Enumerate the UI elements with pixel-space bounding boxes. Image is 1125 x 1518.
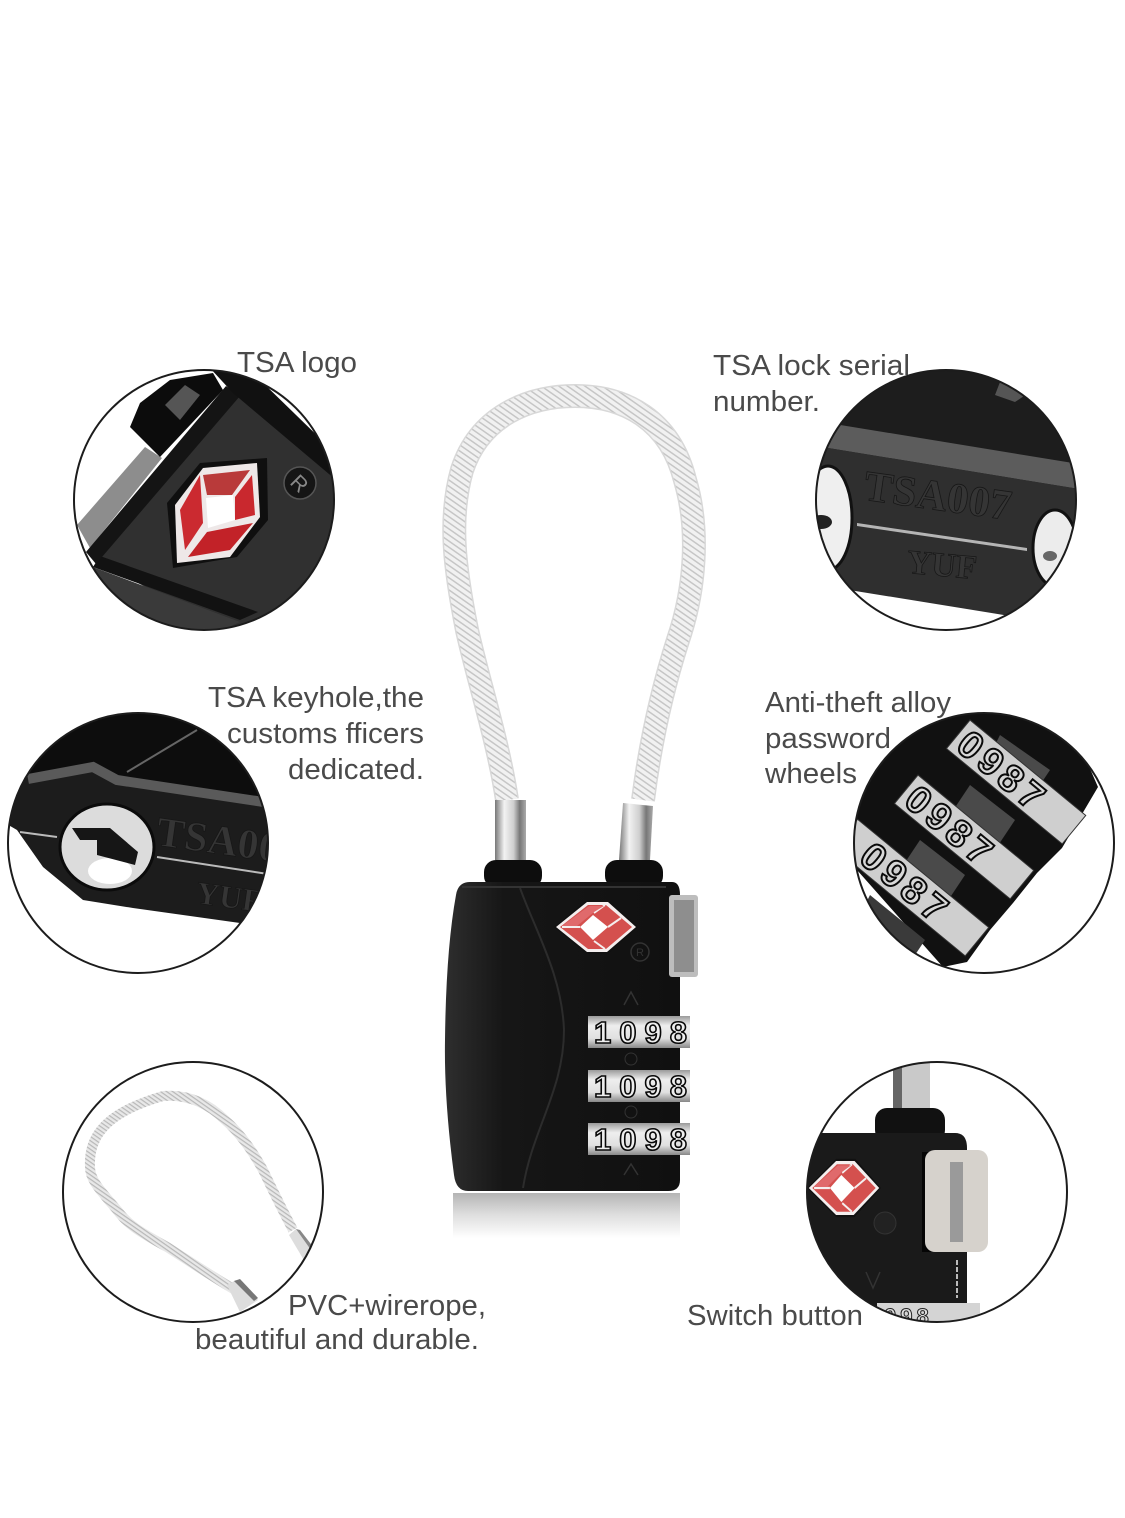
main product: TSA cable lock (445, 396, 698, 1238)
label: TSA keyhole: dedicated. (288, 754, 424, 786)
label: anti-theft alloy password wheels: wheels (764, 758, 857, 790)
registered mark: R (636, 947, 644, 959)
switch button (669, 895, 698, 977)
combination wheels: 1098 (594, 1015, 695, 1050)
combination wheels: 1098 (594, 1122, 695, 1157)
label: anti-theft alloy password wheels: Anti-theft alloy (765, 687, 951, 719)
black lock body (445, 882, 680, 1191)
body highlight curve (520, 888, 564, 1188)
callout: password wheels detail: 0987 (949, 723, 1056, 822)
label: switch button: Switch button (687, 1300, 863, 1332)
combination wheels: 1098 (594, 1069, 695, 1104)
label: TSA lock serial number: TSA lock serial (713, 350, 910, 382)
label: TSA keyhole: TSA keyhole,the (208, 682, 424, 714)
label: PVC + wire rope (195, 1290, 486, 1356)
steel cable loop (454, 396, 694, 800)
callout: TSA keyhole detail: TSA00 (154, 809, 283, 872)
callout: TSA logo detail: R (285, 471, 312, 498)
callout: TSA logo detail (70, 368, 345, 640)
callout: wire rope detail (63, 1062, 323, 1322)
callout: serial number detail: YUF (906, 544, 978, 587)
registered mark (631, 943, 649, 961)
lock body collars (484, 860, 663, 888)
label: PVC + wire rope: PVC+wirerope, (288, 1290, 486, 1322)
metal ferrules (495, 800, 653, 860)
callout: password wheels detail (853, 712, 1115, 974)
label: anti-theft alloy password wheels (764, 687, 951, 790)
callout: serial number detail: TSA007 (861, 463, 1014, 530)
callout: serial number detail (815, 369, 1077, 631)
callout: password wheels detail: 0987 (852, 835, 959, 934)
label: TSA keyhole (208, 682, 424, 786)
mirror reflection (453, 1193, 680, 1238)
combination wheels (588, 992, 695, 1175)
callout: switch button detail (800, 1060, 1067, 1330)
callout: TSA keyhole detail (7, 712, 269, 974)
TSA logo on the body (554, 900, 638, 954)
callout: switch button detail: 098 (884, 1304, 933, 1329)
label: anti-theft alloy password wheels: password (765, 723, 891, 755)
callout: password wheels detail: 0987 (897, 778, 1004, 877)
callout: TSA keyhole detail: YUF (194, 874, 264, 919)
label: TSA lock serial number (713, 350, 910, 418)
label: TSA logo: TSA logo (237, 347, 357, 379)
label: PVC + wire rope: beautiful and durable. (195, 1324, 479, 1356)
label: TSA lock serial number: number. (713, 386, 820, 418)
label: TSA keyhole: customs fficers (227, 718, 424, 750)
